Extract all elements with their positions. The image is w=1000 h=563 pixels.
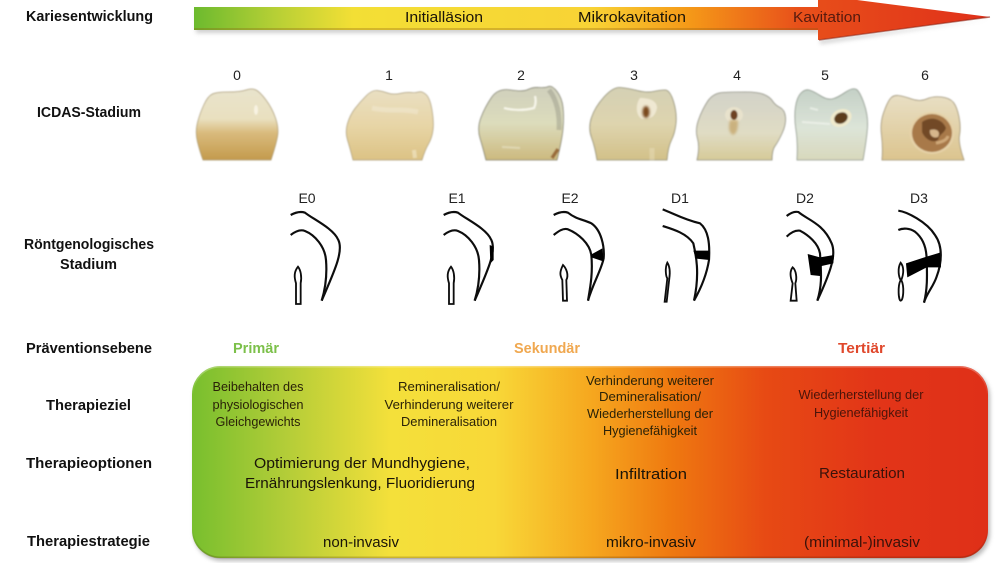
prevention level: Primär: Primär xyxy=(233,341,279,357)
radiographic stage labels: D1 xyxy=(671,190,689,206)
ICDAS numbers: 0 xyxy=(233,67,241,83)
label: ICDAS-Stadium: ICDAS-Stadium xyxy=(37,105,141,121)
icon: tooth ICDAS 2 xyxy=(479,86,564,160)
icon: tooth ICDAS 4 xyxy=(696,92,786,160)
therapy option: Infiltration: Infiltration xyxy=(615,466,687,483)
label: Röntgenologisches Stadium xyxy=(24,237,154,273)
therapy goal: tertiary: Hygienefähigkeit xyxy=(814,406,909,420)
therapy goal: primary: Beibehalten des xyxy=(212,380,304,394)
radiographic stage labels: E2 xyxy=(561,190,579,206)
ICDAS numbers xyxy=(233,67,929,83)
ICDAS numbers: 6 xyxy=(921,67,929,83)
radiograph sketch E0 xyxy=(291,212,340,304)
radiograph sketch D3 xyxy=(898,211,941,303)
panel: therapy gradient xyxy=(192,366,990,561)
label: Präventionsebene: Präventionsebene xyxy=(26,341,152,357)
label: Röntgenologisches Stadium: Röntgenologisches xyxy=(24,237,154,253)
label: Kariesentwicklung: Kariesentwicklung xyxy=(26,9,153,25)
therapy goal: secondary restoration: Hygienefähigkeit xyxy=(603,424,698,438)
therapy goal: secondary restoration xyxy=(586,374,714,438)
therapy goal: secondary restoration: Demineralisation/ xyxy=(599,390,702,404)
radiograph sketch D2 xyxy=(787,212,834,301)
therapy goal: remineralisation xyxy=(384,380,514,429)
therapy goal: primary: Gleichgewichts xyxy=(216,415,300,429)
icon: tooth ICDAS 6 xyxy=(881,95,964,160)
therapy goal: tertiary xyxy=(798,388,924,420)
radiographic stage labels xyxy=(298,190,928,206)
therapy goal: remineralisation: Demineralisation xyxy=(401,415,497,429)
therapy option: hygiene xyxy=(245,455,475,492)
icon: tooth ICDAS 3 xyxy=(590,87,676,160)
radiographic stage labels: D2 xyxy=(796,190,814,206)
arrow stage: Initialläsion: Initialläsion xyxy=(405,9,483,26)
icon: tooth ICDAS 1 xyxy=(346,90,433,160)
label: Therapiestrategie: Therapiestrategie xyxy=(27,534,150,550)
ICDAS numbers: 2 xyxy=(517,67,525,83)
therapy goal: primary: physiologischen xyxy=(212,398,304,412)
radiograph sketch E2 xyxy=(554,212,604,301)
radiographic stage labels: E0 xyxy=(298,190,316,206)
radiograph sketch D1 xyxy=(663,209,709,302)
therapy goal: secondary restoration: Verhinderung weiterer xyxy=(586,374,714,388)
therapy goal: remineralisation: Remineralisation/ xyxy=(398,380,501,394)
icon: tooth ICDAS 5 xyxy=(795,89,868,160)
therapy goal: secondary restoration: Wiederherstellung der xyxy=(587,407,713,421)
therapy goal: tertiary: Wiederherstellung der xyxy=(798,388,924,402)
therapy goal: primary xyxy=(212,380,304,429)
prevention level: Sekundär: Sekundär xyxy=(514,341,580,357)
ICDAS numbers: 5 xyxy=(821,67,829,83)
progression arrow xyxy=(194,0,990,44)
radiographic stage labels: D3 xyxy=(910,190,928,206)
therapy option: hygiene: Ernährungslenkung, Fluoridierung xyxy=(245,475,475,492)
therapy option: Restauration: Restauration xyxy=(819,465,905,482)
ICDAS numbers: 4 xyxy=(733,67,741,83)
radiographic stage labels: E1 xyxy=(448,190,466,206)
arrow stage: Kavitation: Kavitation xyxy=(793,9,861,26)
strategy: minimal-invasiv: (minimal-)invasiv xyxy=(804,534,921,551)
ICDAS numbers: 3 xyxy=(630,67,638,83)
label: Therapieoptionen: Therapieoptionen xyxy=(26,456,152,472)
ICDAS numbers: 1 xyxy=(385,67,393,83)
label: Röntgenologisches Stadium: Stadium xyxy=(60,257,117,273)
radiograph sketch E1 xyxy=(444,212,494,304)
icon: tooth ICDAS 0 xyxy=(196,89,278,160)
strategy: non-invasiv: non-invasiv xyxy=(323,534,399,551)
strategy: mikro-invasiv: mikro-invasiv xyxy=(606,534,697,551)
label: Therapieziel: Therapieziel xyxy=(46,398,131,414)
arrow stage: Mikrokavitation: Mikrokavitation xyxy=(578,9,686,26)
therapy option: hygiene: Optimierung der Mundhygiene, xyxy=(254,455,470,472)
therapy goal: remineralisation: Verhinderung weiterer xyxy=(384,398,514,412)
prevention level: Tertiär: Tertiär xyxy=(838,341,885,357)
